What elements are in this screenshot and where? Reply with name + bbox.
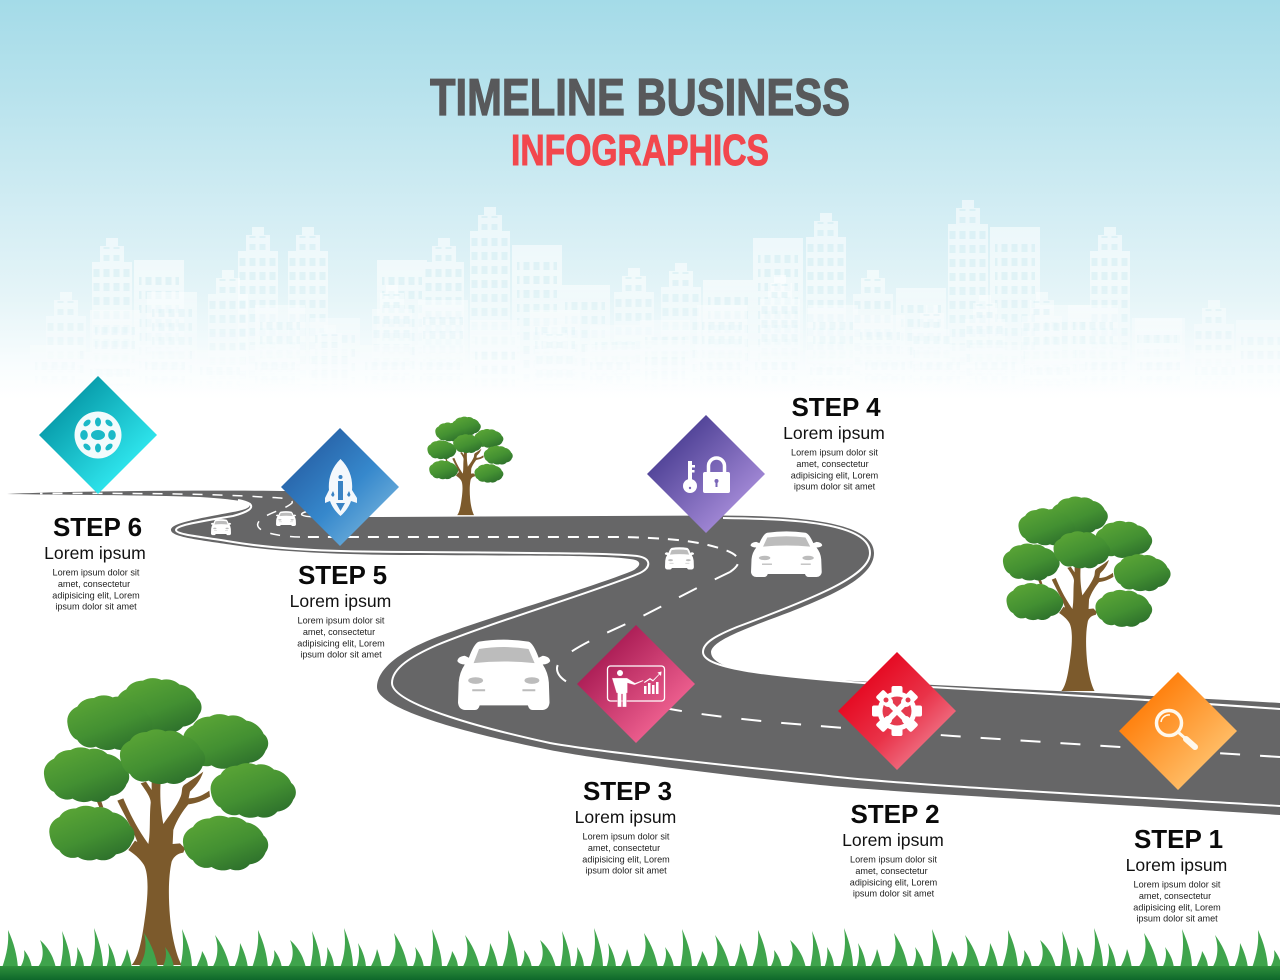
step 6 text: ipsum dolor sit amet bbox=[55, 602, 137, 612]
step 5 text: Lorem ipsum dolor sit bbox=[298, 616, 385, 626]
car: large left bbox=[457, 640, 550, 710]
step 1 text: Lorem ipsum dolor sit bbox=[1134, 880, 1221, 890]
step 2 text bbox=[842, 799, 944, 898]
step 5 text: ipsum dolor sit amet bbox=[300, 650, 382, 660]
winding road bbox=[7, 491, 1280, 815]
icon: presenter with chart bbox=[608, 666, 664, 707]
icon: magnifying glass bbox=[1156, 710, 1195, 747]
step 3 text: amet, consectetur bbox=[588, 843, 660, 853]
step 6 marker bbox=[39, 376, 157, 494]
step 1 text: amet, consectetur bbox=[1139, 891, 1211, 901]
icon: key and padlock bbox=[683, 458, 730, 493]
step 4 text: Lorem ipsum dolor sit bbox=[791, 448, 878, 458]
icon: globe bbox=[74, 412, 122, 458]
icon: rocket bbox=[325, 459, 357, 516]
step 3 text: adipisicing elit, Lorem bbox=[582, 854, 670, 864]
step 6 text bbox=[44, 512, 146, 612]
step 2 text: Lorem ipsum dolor sit bbox=[850, 854, 937, 864]
sky background bbox=[0, 0, 1280, 400]
step 1 text: ipsum dolor sit amet bbox=[1136, 914, 1218, 924]
step 3 text: ipsum dolor sit amet bbox=[585, 866, 667, 876]
step 2 text: adipisicing elit, Lorem bbox=[850, 878, 937, 888]
step 1 text: adipisicing elit, Lorem bbox=[1133, 902, 1221, 912]
step 1 text: STEP 1 bbox=[1134, 824, 1223, 854]
heading: timeline business: TIMELINE BUSINESS bbox=[430, 69, 850, 127]
step 4 marker bbox=[647, 415, 765, 533]
tree: medium right bbox=[1003, 496, 1171, 691]
step 5 text: adipisicing elit, Lorem bbox=[297, 638, 385, 648]
step 1 marker bbox=[1119, 672, 1237, 790]
step 3 text bbox=[575, 776, 676, 876]
step 2 marker bbox=[838, 652, 956, 770]
step 6 text: STEP 6 bbox=[53, 512, 142, 542]
car: farthest bbox=[211, 519, 231, 535]
step 5 marker bbox=[281, 428, 399, 546]
step 2 text: amet, consectetur bbox=[855, 866, 928, 876]
step 4 text: amet, consectetur bbox=[796, 459, 869, 469]
car: large right bbox=[750, 531, 822, 577]
step 4 text: Lorem ipsum bbox=[783, 423, 885, 443]
title bbox=[430, 69, 850, 175]
car: far bbox=[276, 511, 296, 526]
icon: gear with tools bbox=[872, 686, 922, 736]
grass strip bbox=[0, 925, 1280, 980]
city skyline bbox=[54, 200, 1226, 331]
step 5 text: Lorem ipsum bbox=[290, 591, 391, 611]
step 3 marker bbox=[577, 625, 695, 743]
step 6 text: Lorem ipsum dolor sit bbox=[53, 568, 140, 578]
tree: small behind road bbox=[427, 417, 513, 515]
step 3 text: Lorem ipsum bbox=[575, 807, 676, 827]
step 3 text: Lorem ipsum dolor sit bbox=[583, 832, 670, 842]
step 1 text: Lorem ipsum bbox=[1126, 855, 1227, 875]
step 3 text: STEP 3 bbox=[583, 776, 672, 806]
step 6 text: amet, consectetur bbox=[58, 579, 130, 589]
heading: infographics: INFOGRAPHICS bbox=[511, 126, 769, 175]
step 5 text: amet, consectetur bbox=[303, 627, 375, 637]
step 4 text: adipisicing elit, Lorem bbox=[791, 470, 878, 480]
step 6 text: adipisicing elit, Lorem bbox=[52, 590, 140, 600]
tree: large foreground bbox=[44, 678, 296, 965]
step 5 text: STEP 5 bbox=[298, 560, 387, 590]
step 1 text bbox=[1126, 824, 1227, 924]
step 4 text bbox=[783, 392, 885, 492]
step 4 text: STEP 4 bbox=[791, 392, 881, 422]
step 5 text bbox=[290, 560, 391, 660]
step 6 text: Lorem ipsum bbox=[44, 543, 146, 563]
step 2 text: ipsum dolor sit amet bbox=[853, 888, 935, 898]
step 2 text: Lorem ipsum bbox=[842, 830, 944, 850]
step 4 text: ipsum dolor sit amet bbox=[794, 482, 876, 492]
step 2 text: STEP 2 bbox=[850, 799, 940, 829]
car: middle bbox=[665, 547, 694, 569]
